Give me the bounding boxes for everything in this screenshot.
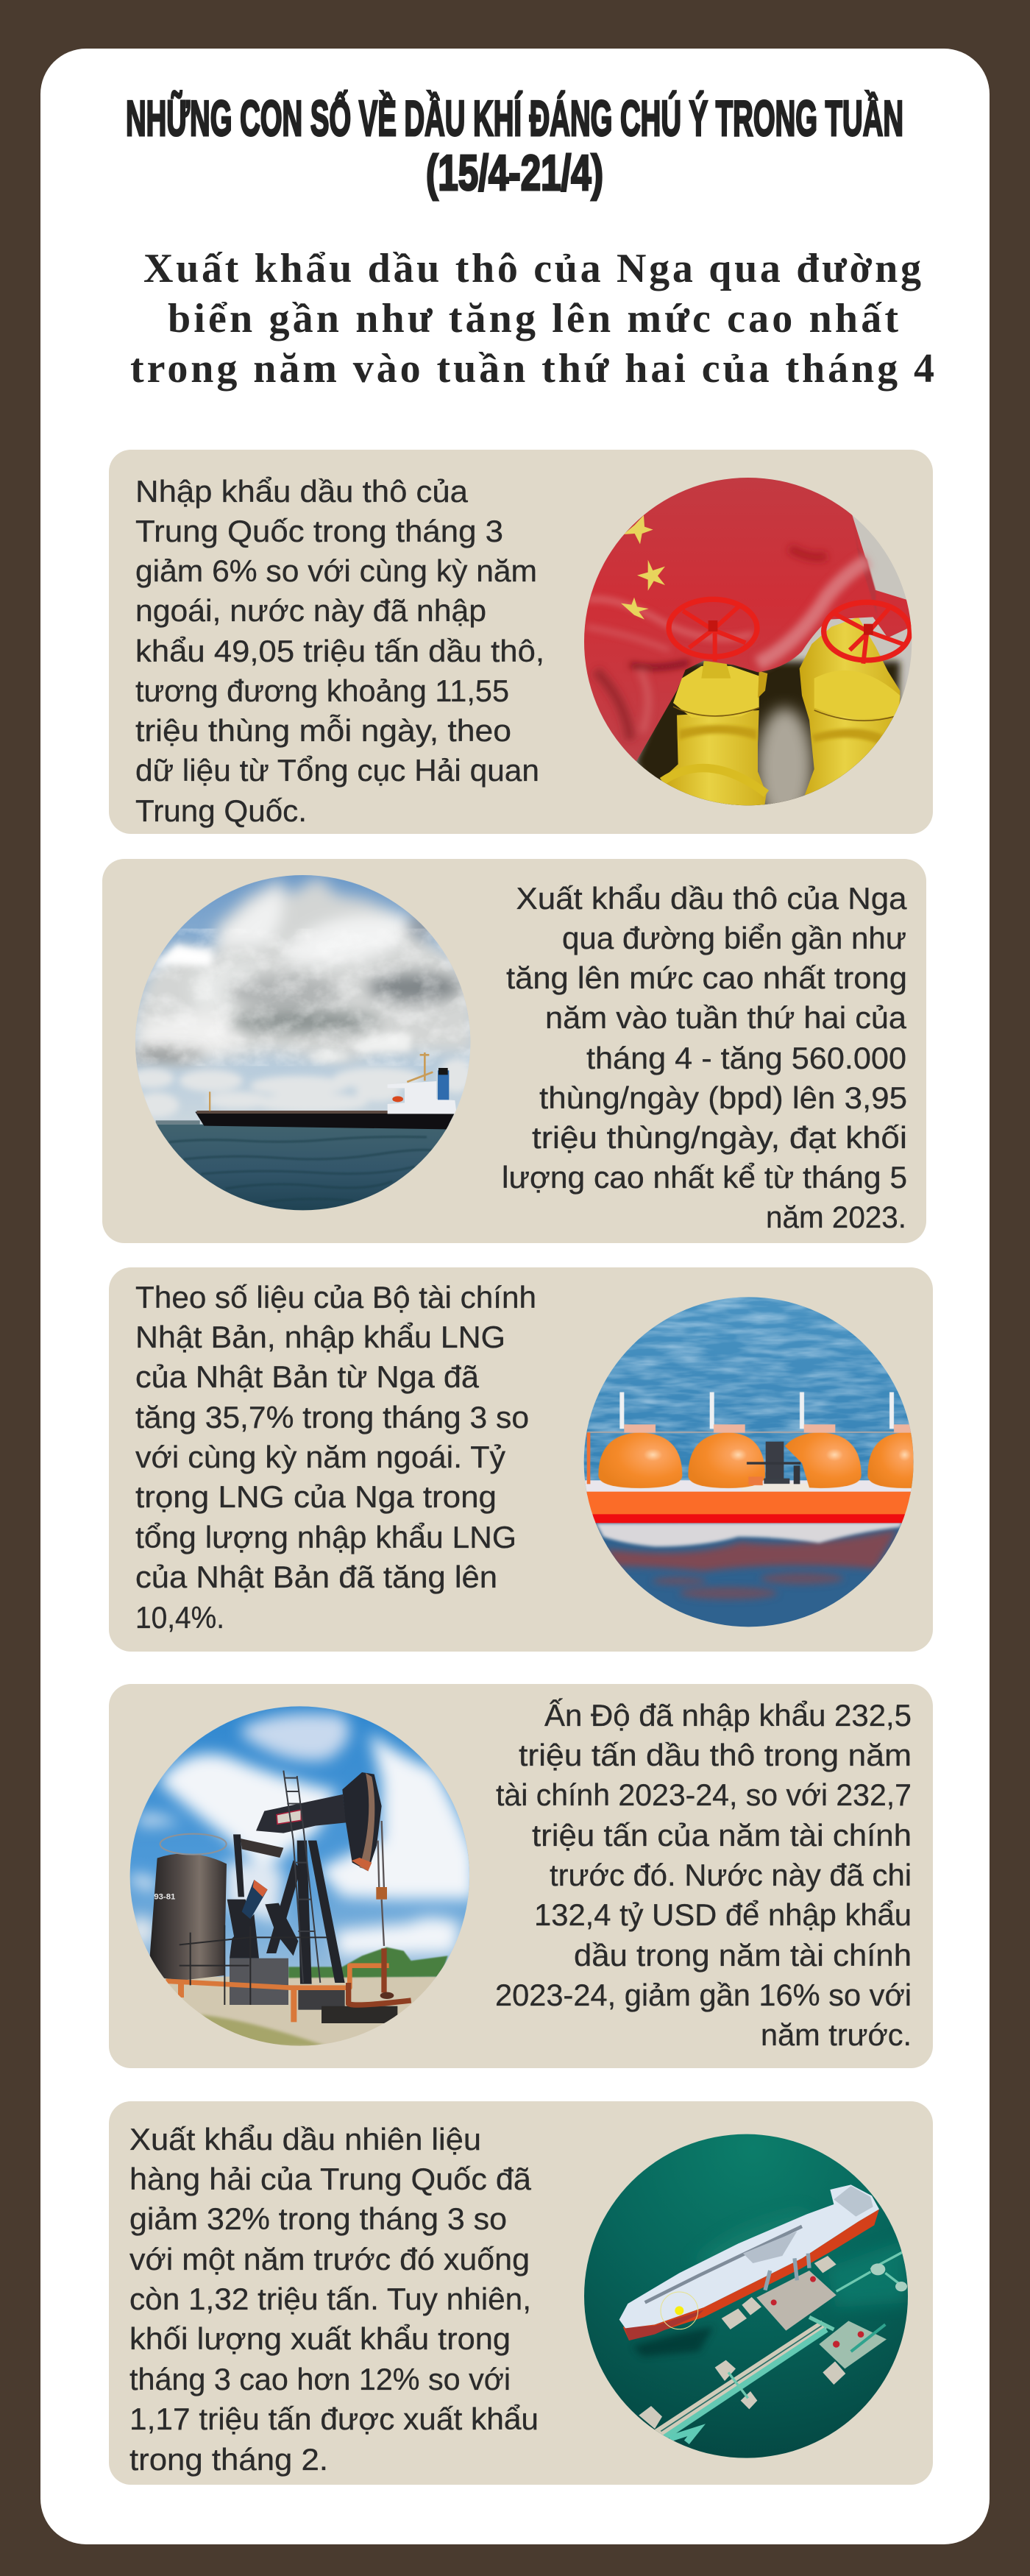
vent masts [619, 1392, 894, 1429]
text block: với cùng kỳ năm ngoái. Tỷ [135, 1440, 505, 1474]
subtitle: trong năm vào tuần thứ hai của tháng 4 [130, 346, 934, 392]
text block: còn 1,32 triệu tấn. Tuy nhiên, [129, 2282, 531, 2316]
title [126, 90, 903, 201]
loading platform [756, 2271, 837, 2331]
photo: LNG carrier with orange domes [581, 1294, 925, 1638]
subtitle: Xuất khẩu dầu thô của Nga qua đường [143, 246, 921, 291]
text block: triệu tấn dầu thô trong năm [519, 1738, 912, 1772]
clouds [132, 877, 476, 1066]
card background [102, 859, 926, 1243]
counterweight crank [242, 1880, 268, 1919]
photo: China flag over yellow valves [584, 478, 912, 805]
title: (15/4-21/4) [426, 145, 603, 201]
pumpjack A-frame [227, 1834, 345, 1984]
text block [135, 474, 544, 828]
text block: tháng 4 - tăng 560.000 [586, 1041, 906, 1075]
text block: tăng lên mức cao nhất trong [506, 960, 907, 995]
horsehead [342, 1772, 382, 1871]
ladder [283, 1771, 320, 1983]
text block: năm vào tuần thứ hai của [545, 1000, 907, 1035]
card background [109, 1267, 933, 1652]
panel: Japan LNG imports [109, 1267, 933, 1652]
text block [495, 1698, 912, 2052]
dome caps [624, 1424, 918, 1433]
text block: giảm 32% trong tháng 3 so [129, 2201, 507, 2236]
subtitle: biển gần như tăng lên mức cao nhất [168, 296, 898, 342]
lower clouds [130, 1058, 473, 1117]
text block: Theo số liệu của Bộ tài chính [135, 1280, 536, 1314]
text block [502, 881, 907, 1234]
handrail [180, 1925, 327, 2005]
ground [127, 1977, 475, 2050]
flag cloth [581, 475, 911, 761]
deck [581, 1480, 925, 1492]
text block: triệu thùng/ngày, đạt khối [532, 1120, 907, 1155]
secondary platform [819, 2321, 887, 2368]
card background [109, 2101, 933, 2485]
text block: năm trước. [761, 2017, 912, 2052]
flag stars [623, 515, 653, 544]
text block: Xuất khẩu dầu nhiên liệu [129, 2122, 481, 2156]
text block: Trung Quốc trong tháng 3 [135, 514, 503, 548]
text block: dầu trong năm tài chính [574, 1938, 912, 1972]
foam [596, 1522, 903, 1546]
cargo domes [598, 1432, 925, 1488]
panel: India crude imports [109, 1684, 933, 2068]
text block: hàng hải của Trung Quốc đã [129, 2162, 532, 2196]
text block: qua đường biển gần như [562, 921, 906, 955]
text block [135, 1280, 536, 1635]
right pipe [799, 618, 901, 795]
folds [586, 548, 868, 740]
text block: 2023-24, giảm gần 16% so với [495, 1978, 912, 2012]
text block: của Nhật Bản từ Nga đã [135, 1359, 480, 1394]
card background [109, 1684, 933, 2068]
text block: Nhập khẩu dầu thô của [135, 474, 469, 509]
text block: với một năm trước đó xuống [129, 2242, 530, 2276]
tanker deck [619, 2184, 879, 2328]
text block: ngoái, nước này đã nhập [135, 593, 486, 628]
tanker hull [623, 2209, 879, 2340]
left valve wheel [669, 599, 757, 661]
photo: tanker under cloudy sky [120, 872, 476, 1216]
text block: tài chính 2023-24, so với 232,7 [496, 1777, 912, 1812]
text block: Nhật Bản, nhập khẩu LNG [135, 1320, 505, 1354]
text block: 1,17 triệu tấn được xuất khẩu [129, 2402, 539, 2436]
subtitle [130, 246, 934, 392]
text block: 132,4 tỷ USD để nhập khẩu [534, 1897, 912, 1932]
polished rod [378, 1821, 384, 1946]
text block: 10,4%. [135, 1600, 224, 1635]
text block: triệu tấn của năm tài chính [532, 1818, 912, 1853]
photo: oil pumpjack and tank: 93-81 [154, 1893, 175, 1902]
text block: Trung Quốc. [135, 793, 307, 828]
text block: trọng LNG của Nga trong [135, 1479, 497, 1514]
hull [581, 1491, 925, 1515]
orange pipes [166, 1966, 389, 2022]
mooring dolphins [639, 2256, 845, 2429]
text block: Ấn Độ đã nhập khẩu 232,5 [544, 1698, 912, 1733]
sea [157, 1125, 449, 1210]
panel: China crude imports [109, 450, 933, 834]
walking beam [256, 1794, 346, 1833]
pipe manifold [766, 1442, 784, 1483]
right valve wheel [824, 602, 910, 664]
card background [109, 450, 933, 834]
photo: aerial LNG tanker at jetty [581, 2131, 925, 2474]
text block: khẩu 49,05 triệu tấn dầu thô, [135, 634, 544, 668]
ship superstructure [388, 1081, 457, 1114]
lower sea [595, 1522, 902, 1627]
text block: triệu thùng mỗi ngày, theo [135, 713, 511, 748]
panel: China marine fuel exports [109, 2101, 933, 2485]
text block: thùng/ngày (bpd) lên 3,95 [539, 1080, 907, 1115]
pumpjack base [230, 1958, 288, 2005]
text block: trước đó. Nước này đã chi [550, 1858, 912, 1892]
text block: của Nhật Bản đã tăng lên [135, 1560, 497, 1594]
rail [587, 1430, 925, 1434]
panel: Russian crude exports [102, 859, 926, 1243]
text block: giảm 6% so với cùng kỳ năm [135, 553, 537, 588]
text block: lượng cao nhất kể từ tháng 5 [502, 1160, 907, 1195]
storage tank [150, 1853, 227, 1981]
distant shore [156, 1120, 200, 1125]
text block [129, 2122, 539, 2477]
text block: Xuất khẩu dầu thô của Nga [516, 881, 907, 916]
text block: tổng lượng nhập khẩu LNG [135, 1520, 516, 1554]
text block: khối lượng xuất khẩu trong [129, 2321, 511, 2356]
text block: năm 2023. [766, 1200, 906, 1234]
clouds [127, 1713, 475, 1956]
left pipe [664, 710, 767, 805]
text block: tháng 3 cao hơn 12% so với [129, 2362, 511, 2396]
text block: trong tháng 2. [129, 2442, 328, 2477]
foremast [209, 1091, 210, 1111]
photo: oil pumpjack and tank [127, 1703, 475, 2050]
text block: tương đương khoảng 11,55 [135, 673, 509, 708]
tanker hull [195, 1112, 454, 1129]
trees [288, 1947, 448, 1978]
text block: dữ liệu từ Tổng cục Hải quan [135, 753, 539, 788]
trestle [657, 2252, 903, 2442]
text block: tăng 35,7% trong tháng 3 so [135, 1400, 529, 1434]
